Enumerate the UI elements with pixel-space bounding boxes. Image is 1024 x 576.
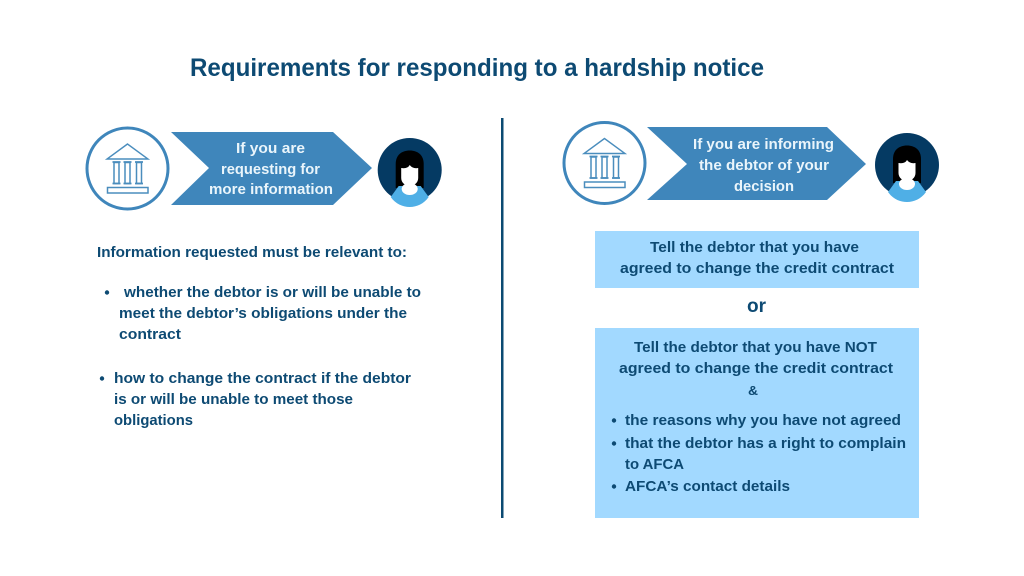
panel: requesting more information	[87, 128, 442, 429]
arrow: requesting for more information: more information	[209, 181, 333, 198]
vertical divider	[501, 118, 504, 518]
callout: not agreed to change: Tell the debtor that you have NOT	[634, 339, 877, 356]
arrow: requesting for more information: If you are	[236, 140, 305, 157]
icon: person, left	[378, 138, 442, 207]
callout: agreed to change	[595, 231, 919, 288]
icon: bank, left	[87, 128, 168, 209]
panel: informing the debtor	[564, 122, 939, 518]
text block: information requested: obligations	[114, 412, 193, 429]
callout: not agreed to change: that the debtor has a right to complain	[625, 435, 906, 452]
icon: person, right	[875, 133, 939, 202]
arrow: requesting for more information: requesting for	[221, 161, 320, 178]
text block: information requested: contract	[119, 326, 181, 343]
text block: information requested: how to change the contract if the debtor	[114, 370, 411, 387]
text block: information requested	[97, 244, 421, 429]
arrow: informing the debtor of your decision: the debtor of your	[699, 157, 829, 174]
callout: not agreed to change: the reasons why you have not agreed	[625, 412, 901, 429]
arrow: informing the debtor of your decision: decision	[734, 178, 794, 195]
title: Requirements for responding to a hardship notice	[190, 54, 764, 82]
callout: not agreed to change: to AFCA	[625, 456, 684, 473]
arrow: requesting for more information	[171, 132, 372, 205]
arrow: informing the debtor of your decision	[647, 127, 866, 200]
callout: agreed to change: Tell the debtor that you have	[650, 239, 859, 256]
text: or: or	[747, 296, 767, 317]
callout: agreed to change: agreed to change the credit contract	[620, 260, 894, 277]
arrow: informing the debtor of your decision: If you are informing	[693, 136, 834, 153]
text block: information requested: meet the debtor’s obligations under the	[119, 305, 407, 322]
callout: not agreed to change	[595, 328, 919, 518]
callout: not agreed to change: agreed to change the credit contract	[619, 360, 893, 377]
text block: information requested: Information requested must be relevant to:	[97, 244, 407, 261]
text block: information requested: is or will be unable to meet those	[114, 391, 353, 408]
text block: information requested: whether the debtor is or will be unable to	[123, 284, 421, 301]
callout: not agreed to change: &	[748, 383, 758, 398]
callout: not agreed to change: AFCA’s contact details	[625, 478, 790, 495]
icon: bank, right	[564, 122, 645, 204]
